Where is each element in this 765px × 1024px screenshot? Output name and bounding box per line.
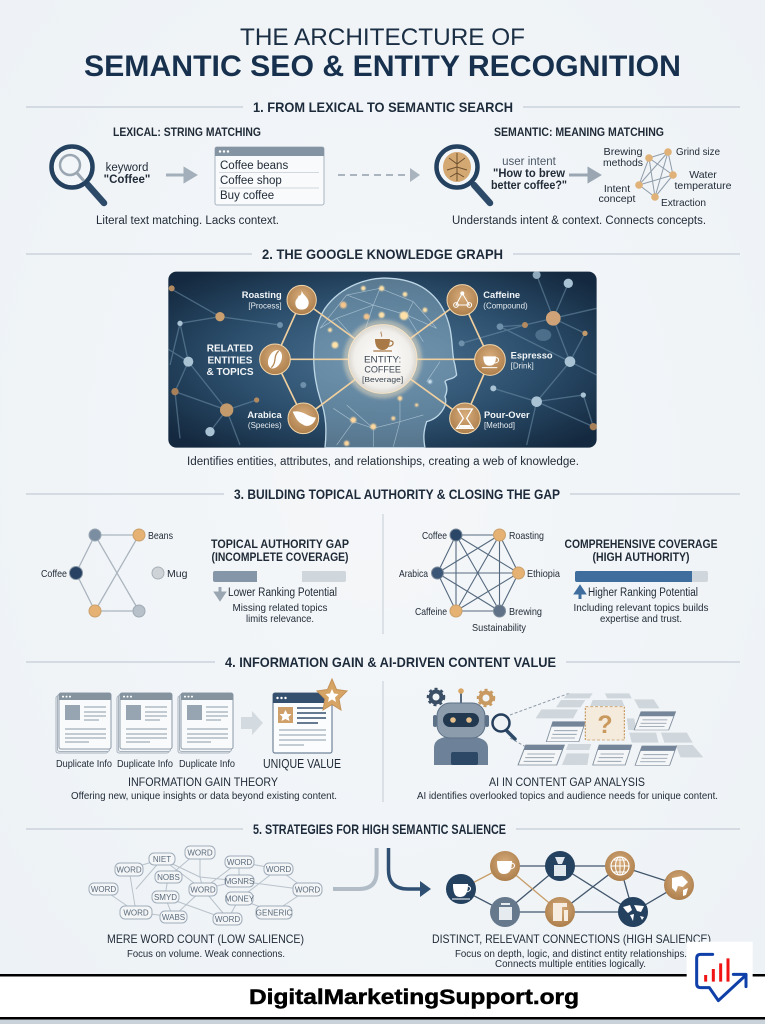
word cloud network: NOBS — [157, 873, 180, 882]
high salience caption: Focus on depth, logic, and distinct entity relationships. — [455, 948, 687, 960]
user intent text: better coffee?" — [491, 180, 567, 192]
duplicate documents — [56, 693, 235, 770]
sparse graph — [41, 529, 188, 617]
panel: AI content gap — [417, 688, 718, 802]
arrow: lexical to semantic — [338, 168, 420, 182]
icon: magnifier — [52, 146, 104, 203]
center entity node: COFFEE — [364, 365, 401, 375]
information gain caption: Offering new, unique insights or data beyond existing content. — [71, 790, 337, 802]
icon: world node — [664, 870, 694, 900]
coverage text: (HIGH AUTHORITY) — [592, 552, 690, 564]
arrow: grey connector — [333, 848, 377, 889]
node: related entities: ENTITIES — [208, 355, 253, 366]
high salience caption: DISTINCT, RELEVANT CONNECTIONS (HIGH SALIENCE) — [432, 932, 711, 946]
icon: machine node — [545, 897, 575, 927]
word cloud network: WABS — [162, 913, 185, 922]
gap caption — [228, 587, 337, 625]
word cloud network: WORD — [190, 886, 216, 894]
dense graph: Roasting — [509, 530, 544, 542]
word cloud network: WORD — [295, 886, 320, 894]
dense graph: Arabica — [399, 568, 428, 580]
entity network — [446, 851, 694, 927]
concept graph — [598, 146, 732, 209]
arrow — [569, 169, 599, 181]
coverage caption: Higher Ranking Potential — [588, 587, 698, 599]
low salience caption: Focus on volume. Weak connections. — [127, 948, 285, 960]
keyword text: keyword — [106, 162, 148, 174]
lexical heading: LEXICAL: STRING MATCHING — [113, 127, 261, 139]
icon: coffee cup — [373, 332, 393, 351]
icon: map node — [618, 897, 648, 927]
coverage progress bar — [575, 571, 708, 582]
user intent text: "How to brew — [493, 168, 565, 180]
title — [84, 24, 681, 83]
icon: cup node — [446, 874, 476, 904]
word cloud network — [89, 846, 322, 925]
node: roasting — [242, 285, 316, 315]
panel background — [168, 272, 597, 448]
word cloud network: WORD — [187, 848, 213, 858]
arrow: blue connector — [388, 848, 431, 897]
word cloud network: SMYD — [154, 893, 177, 902]
gap text: (INCOMPLETE COVERAGE) — [212, 552, 349, 564]
up arrow — [576, 587, 584, 599]
arrow — [241, 711, 263, 735]
caption: Literal text matching. Lacks context. — [96, 215, 279, 227]
panel: knowledge graph — [167, 271, 597, 448]
center entity node — [343, 320, 422, 398]
concept graph: Intent — [604, 183, 630, 195]
low salience caption: MERE WORD COUNT (LOW SALIENCE) — [107, 932, 304, 946]
coverage caption: Including relevant topics builds — [574, 602, 708, 614]
duplicate documents: Duplicate Info — [117, 759, 173, 770]
concept graph: methods — [603, 157, 643, 169]
gap caption: limits relevance. — [246, 613, 314, 625]
dense graph: Sustainability — [472, 622, 527, 634]
word cloud network: WORD — [116, 866, 142, 874]
down arrow — [216, 587, 224, 599]
word cloud network: WORD — [215, 915, 240, 924]
gap text: TOPICAL AUTHORITY GAP — [211, 539, 349, 551]
AI caption: AI IN CONTENT GAP ANALYSIS — [489, 775, 645, 789]
word cloud network: GENERIC — [256, 908, 292, 918]
gap question mark: ? — [597, 711, 613, 739]
semantic heading: SEMANTIC: MEANING MATCHING — [494, 127, 664, 139]
panel: lexical string matching — [52, 127, 324, 227]
icon: logo — [687, 942, 753, 1001]
section 3 heading: 3. BUILDING TOPICAL AUTHORITY & CLOSING THE GAP — [234, 486, 560, 502]
dense graph: Caffeine — [415, 606, 447, 618]
node: espresso — [475, 345, 553, 375]
concept graph: Brewing — [604, 146, 643, 158]
panel: information gain — [56, 679, 347, 802]
icon: globe node — [605, 851, 635, 881]
concept graph: temperature — [674, 180, 732, 192]
sparse graph: Coffee — [41, 568, 67, 580]
background network — [167, 271, 597, 445]
node: arabica: (Species) — [248, 421, 282, 430]
node: pour-over — [450, 403, 530, 434]
information gain caption — [71, 775, 337, 802]
panel: semantic meaning matching — [436, 127, 732, 227]
title: THE ARCHITECTURE OF — [240, 24, 525, 51]
section 4 heading: 4. INFORMATION GAIN & AI-DRIVEN CONTENT VALUE — [225, 654, 556, 670]
icon: grinder node — [545, 851, 575, 881]
node: arabica: Arabica — [247, 410, 282, 420]
gap text — [211, 539, 349, 564]
word cloud network: WORD — [266, 865, 291, 874]
node: related entities: & TOPICS — [207, 367, 254, 378]
duplicate documents: Duplicate Info — [179, 759, 235, 770]
node: roasting: [Process] — [248, 302, 282, 311]
footer site name: DigitalMarketingSupport.org — [249, 985, 579, 1009]
AI caption — [417, 775, 718, 802]
user intent text — [491, 156, 567, 192]
concept graph: Water — [689, 169, 717, 181]
word cloud network: MONEY — [225, 894, 255, 904]
dense graph: Ethiopia — [527, 568, 560, 580]
high salience caption: Connects multiple entities logically. — [495, 958, 646, 970]
node: pour-over: Pour-Over — [484, 410, 530, 420]
node: caffeine: Caffeine — [483, 290, 520, 300]
node: roasting: Roasting — [242, 290, 282, 300]
AI caption: AI identifies overlooked topics and audience needs for unique content. — [417, 790, 718, 802]
keyword text — [104, 162, 150, 186]
coverage caption — [574, 587, 708, 625]
node: espresso: [Drink] — [511, 362, 534, 371]
low salience caption — [107, 932, 304, 960]
head silhouette — [314, 278, 457, 448]
panel: comprehensive coverage — [399, 529, 718, 634]
search results window: Coffee beans — [220, 160, 288, 172]
word cloud network: MGNRS — [225, 877, 254, 886]
concept graph: concept — [598, 193, 636, 205]
search results window: Buy coffee — [220, 190, 274, 202]
node: espresso: Espresso — [511, 350, 553, 360]
sparse graph: Beans — [148, 530, 173, 542]
search results window: Coffee shop — [220, 175, 282, 187]
panel: topical authority gap — [41, 529, 349, 625]
caption: Understands intent & context. Connects concepts. — [452, 215, 706, 227]
icon: brain magnifier — [436, 146, 490, 203]
icon: robot — [433, 688, 489, 765]
coverage text — [564, 539, 718, 564]
center entity node: ENTITY: — [364, 355, 401, 365]
knowledge graph caption: Identifies entities, attributes, and relationships, creating a web of knowledge. — [187, 456, 579, 468]
word cloud network: WORD — [227, 858, 252, 867]
footer — [0, 974, 765, 1024]
content grid — [518, 693, 703, 765]
word cloud network: WORD — [123, 908, 149, 918]
sparse graph: Mug — [167, 568, 188, 580]
node: arabica — [247, 403, 319, 434]
search results window — [215, 147, 324, 205]
icon: star — [317, 679, 347, 710]
icon: press node — [490, 897, 520, 927]
duplicate documents: Duplicate Info — [56, 759, 112, 770]
icon: coffee node — [490, 851, 520, 881]
information gain caption: INFORMATION GAIN THEORY — [128, 775, 278, 789]
concept graph: Grind size — [676, 146, 720, 158]
node: related entities: RELATED — [207, 344, 253, 355]
user intent text: user intent — [502, 156, 557, 168]
connector lines — [280, 308, 484, 410]
node: pour-over: [Method] — [484, 421, 515, 430]
gap progress bar — [213, 571, 346, 582]
unique document — [273, 679, 347, 753]
concept graph: Extraction — [661, 197, 706, 209]
icon: gears — [428, 689, 494, 706]
arrow — [166, 169, 195, 181]
coverage caption: expertise and trust. — [600, 613, 682, 625]
node: caffeine — [447, 285, 528, 315]
node: caffeine: (Compound) — [483, 302, 528, 311]
dense graph — [399, 529, 560, 634]
icon: magnifier — [492, 693, 570, 752]
center entity node: [Beverage] — [362, 375, 403, 384]
coverage text: COMPREHENSIVE COVERAGE — [564, 539, 718, 551]
section 2 heading: 2. THE GOOGLE KNOWLEDGE GRAPH — [262, 246, 503, 262]
unique value label: UNIQUE VALUE — [263, 757, 341, 771]
section 1 heading: 1. FROM LEXICAL TO SEMANTIC SEARCH — [253, 99, 513, 115]
word cloud network: NIET — [153, 855, 171, 864]
gap caption: Missing related topics — [232, 602, 328, 614]
dense graph: Brewing — [509, 606, 542, 618]
node: related entities — [207, 344, 290, 378]
dense graph: Coffee — [422, 530, 447, 542]
word cloud network: WORD — [91, 885, 116, 894]
title: SEMANTIC SEO & ENTITY RECOGNITION — [84, 50, 681, 83]
keyword text: "Coffee" — [104, 174, 150, 186]
high salience caption — [432, 932, 711, 970]
section 5 heading: 5. STRATEGIES FOR HIGH SEMANTIC SALIENCE — [253, 821, 506, 837]
gap caption: Lower Ranking Potential — [228, 587, 337, 599]
